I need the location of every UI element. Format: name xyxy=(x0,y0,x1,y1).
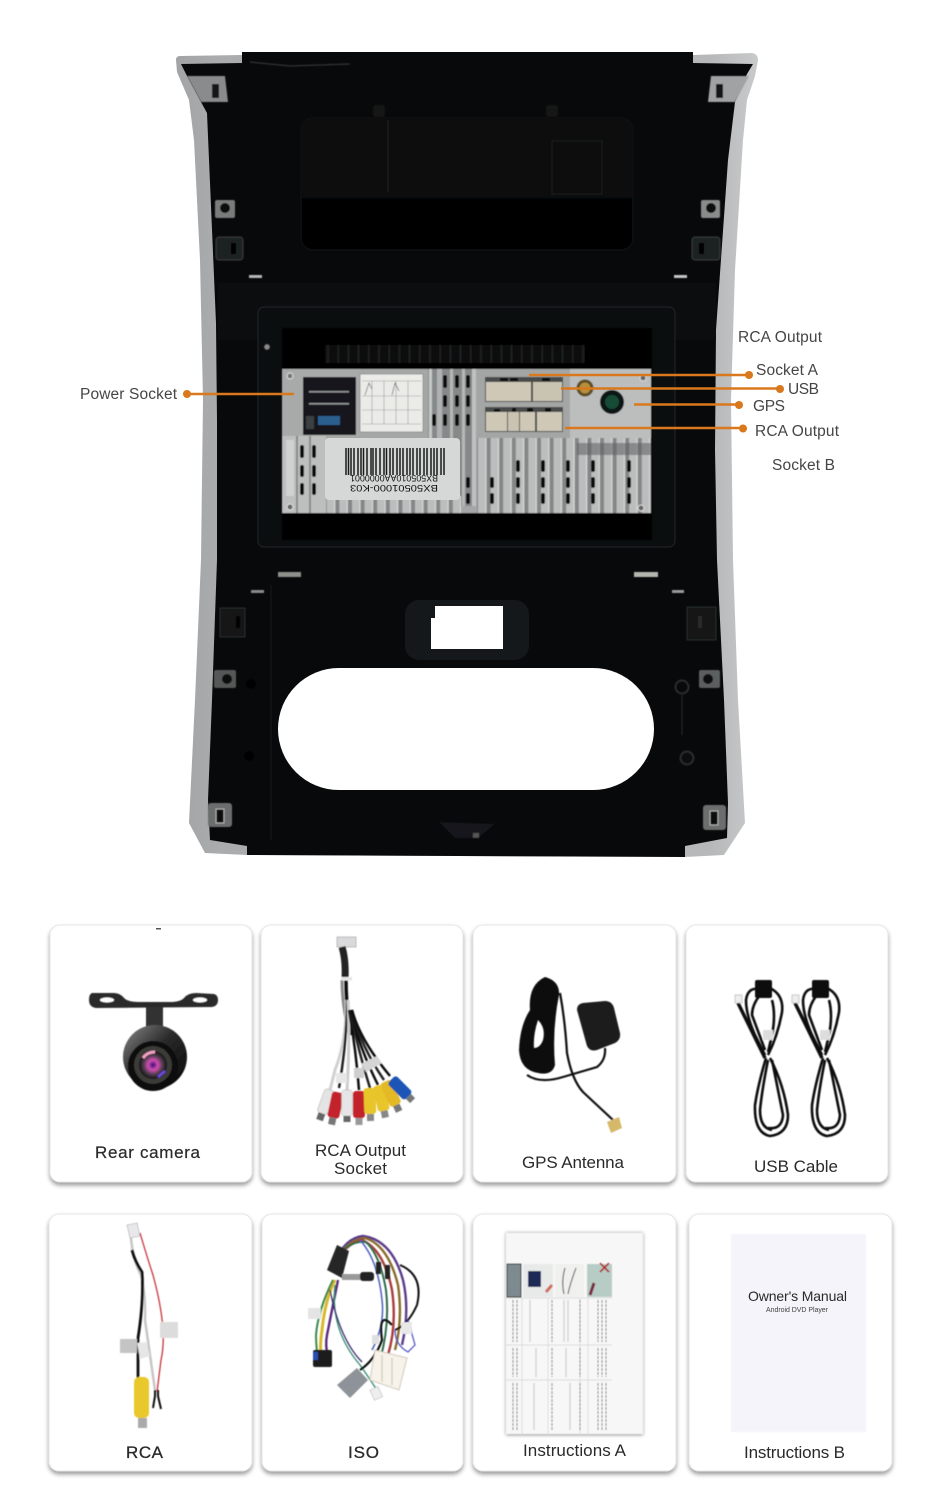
head unit frame xyxy=(258,307,675,547)
black moulded panel xyxy=(181,52,753,857)
silver outer shell xyxy=(176,53,758,857)
window cutout surround xyxy=(405,600,529,660)
caption: USB Cable xyxy=(754,1157,838,1176)
icon: ISO wiring harness xyxy=(316,1236,419,1395)
callout: GPS: GPS xyxy=(753,398,785,415)
Socket B connectors xyxy=(485,407,563,432)
lower cooling fins xyxy=(477,438,651,513)
head unit body xyxy=(264,328,652,540)
callout: Power Socket: Power Socket xyxy=(80,386,178,403)
icon: GPS antenna xyxy=(519,977,622,1133)
callout: RCA Output xyxy=(565,423,840,440)
white oval cutout xyxy=(278,668,654,790)
card: RCA Output Socket: Socket xyxy=(334,1159,387,1178)
caption: Instructions A xyxy=(523,1441,627,1460)
caption: GPS Antenna xyxy=(522,1153,625,1172)
icon: RCA output cable xyxy=(314,937,417,1126)
USB and GPS plate xyxy=(570,369,651,443)
Socket A connectors xyxy=(476,369,570,439)
callout: Power Socket xyxy=(80,386,294,403)
callout: USB: USB xyxy=(788,381,819,398)
card: USB Cable xyxy=(686,925,888,1182)
caption: Instructions B xyxy=(744,1443,845,1462)
callout: Socket A xyxy=(529,362,819,379)
label: Socket B: Socket B xyxy=(772,457,835,474)
manual subtitle: Android DVD Player xyxy=(766,1307,829,1314)
caption: Rear camera xyxy=(95,1143,201,1162)
label: RCA Output top: RCA Output xyxy=(738,329,823,346)
icon: instruction sheet xyxy=(506,1233,643,1435)
icon: owner's manual booklet xyxy=(731,1234,866,1432)
icon: RCA camera cable xyxy=(120,1223,178,1428)
barcode label: BX50501000-K03 xyxy=(350,482,438,493)
card: ISO xyxy=(262,1214,463,1471)
callout: GPS xyxy=(634,398,785,415)
left lower fins xyxy=(282,436,461,513)
card: Instructions A xyxy=(473,1214,676,1471)
centre cooling fins xyxy=(428,369,476,506)
card: Instructions B xyxy=(689,1214,892,1471)
caption: RCA xyxy=(126,1443,164,1462)
product photo: dash frame rear view xyxy=(176,52,758,857)
manual title: Owner's Manual xyxy=(748,1288,847,1304)
power connector block xyxy=(282,369,360,436)
top recess xyxy=(250,62,633,250)
caption: ISO xyxy=(348,1443,379,1462)
wiring sticker xyxy=(360,374,423,432)
label serial numbers (upside down): BX505010AA0000001 xyxy=(350,472,438,483)
white square cutout xyxy=(431,606,503,649)
callout: USB xyxy=(561,381,819,398)
callout: RCA Output: RCA Output xyxy=(755,423,840,440)
icon: rear camera xyxy=(89,993,218,1091)
card: RCA Output Socket xyxy=(261,925,463,1182)
card: RCA xyxy=(49,1214,252,1471)
callout: Socket A: Socket A xyxy=(756,362,819,379)
caption: RCA Output xyxy=(315,1141,406,1160)
panel step band xyxy=(218,283,716,340)
small clips and tabs xyxy=(187,76,749,840)
card: Rear camera xyxy=(50,925,252,1182)
barcode label xyxy=(325,438,460,500)
card: GPS Antenna xyxy=(473,925,676,1182)
icon: USB cable pair xyxy=(735,980,845,1136)
